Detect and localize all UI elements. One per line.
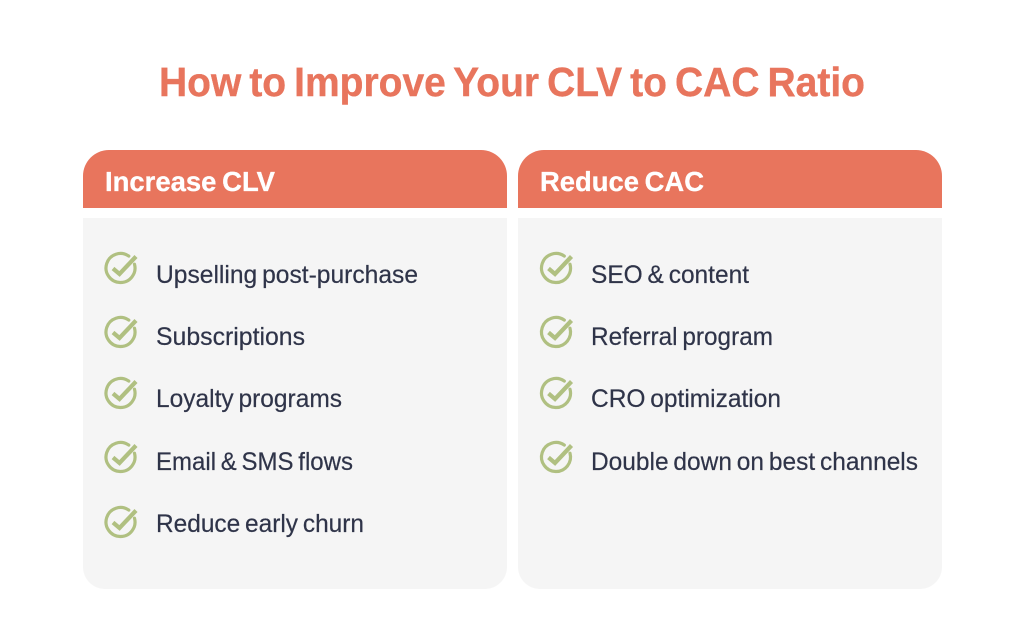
icon: check	[106, 378, 136, 407]
icon: check	[542, 378, 572, 407]
list item: Subscriptions	[156, 323, 305, 351]
panel body: increase CLV	[83, 218, 507, 589]
heading: reduce CAC: Reduce CAC	[540, 166, 704, 197]
icon: check	[542, 442, 572, 471]
list item: Upselling post-purchase	[156, 261, 418, 289]
panel body: reduce CAC	[518, 218, 942, 589]
panel: reduce CAC	[518, 150, 942, 589]
list item: Referral program	[591, 323, 773, 351]
list item: Email & SMS flows	[156, 448, 353, 476]
panel header: increase CLV	[83, 150, 507, 208]
list item: Reduce early churn	[156, 510, 364, 538]
icon: check	[106, 317, 136, 346]
list item: CRO optimization	[591, 385, 781, 413]
icon: check	[106, 507, 136, 536]
icon: check	[106, 442, 136, 471]
list item: Double down on best channels	[591, 448, 918, 476]
list item: SEO & content	[591, 261, 749, 289]
icon: check	[542, 253, 572, 282]
heading: increase CLV: Increase CLV	[105, 166, 275, 197]
title: How to Improve Your CLV to CAC Ratio	[159, 59, 865, 105]
icon: check	[542, 317, 572, 346]
icon: check	[106, 253, 136, 282]
list item: Loyalty programs	[156, 385, 342, 413]
panel header: reduce CAC	[518, 150, 942, 208]
panel: increase CLV	[83, 150, 507, 589]
